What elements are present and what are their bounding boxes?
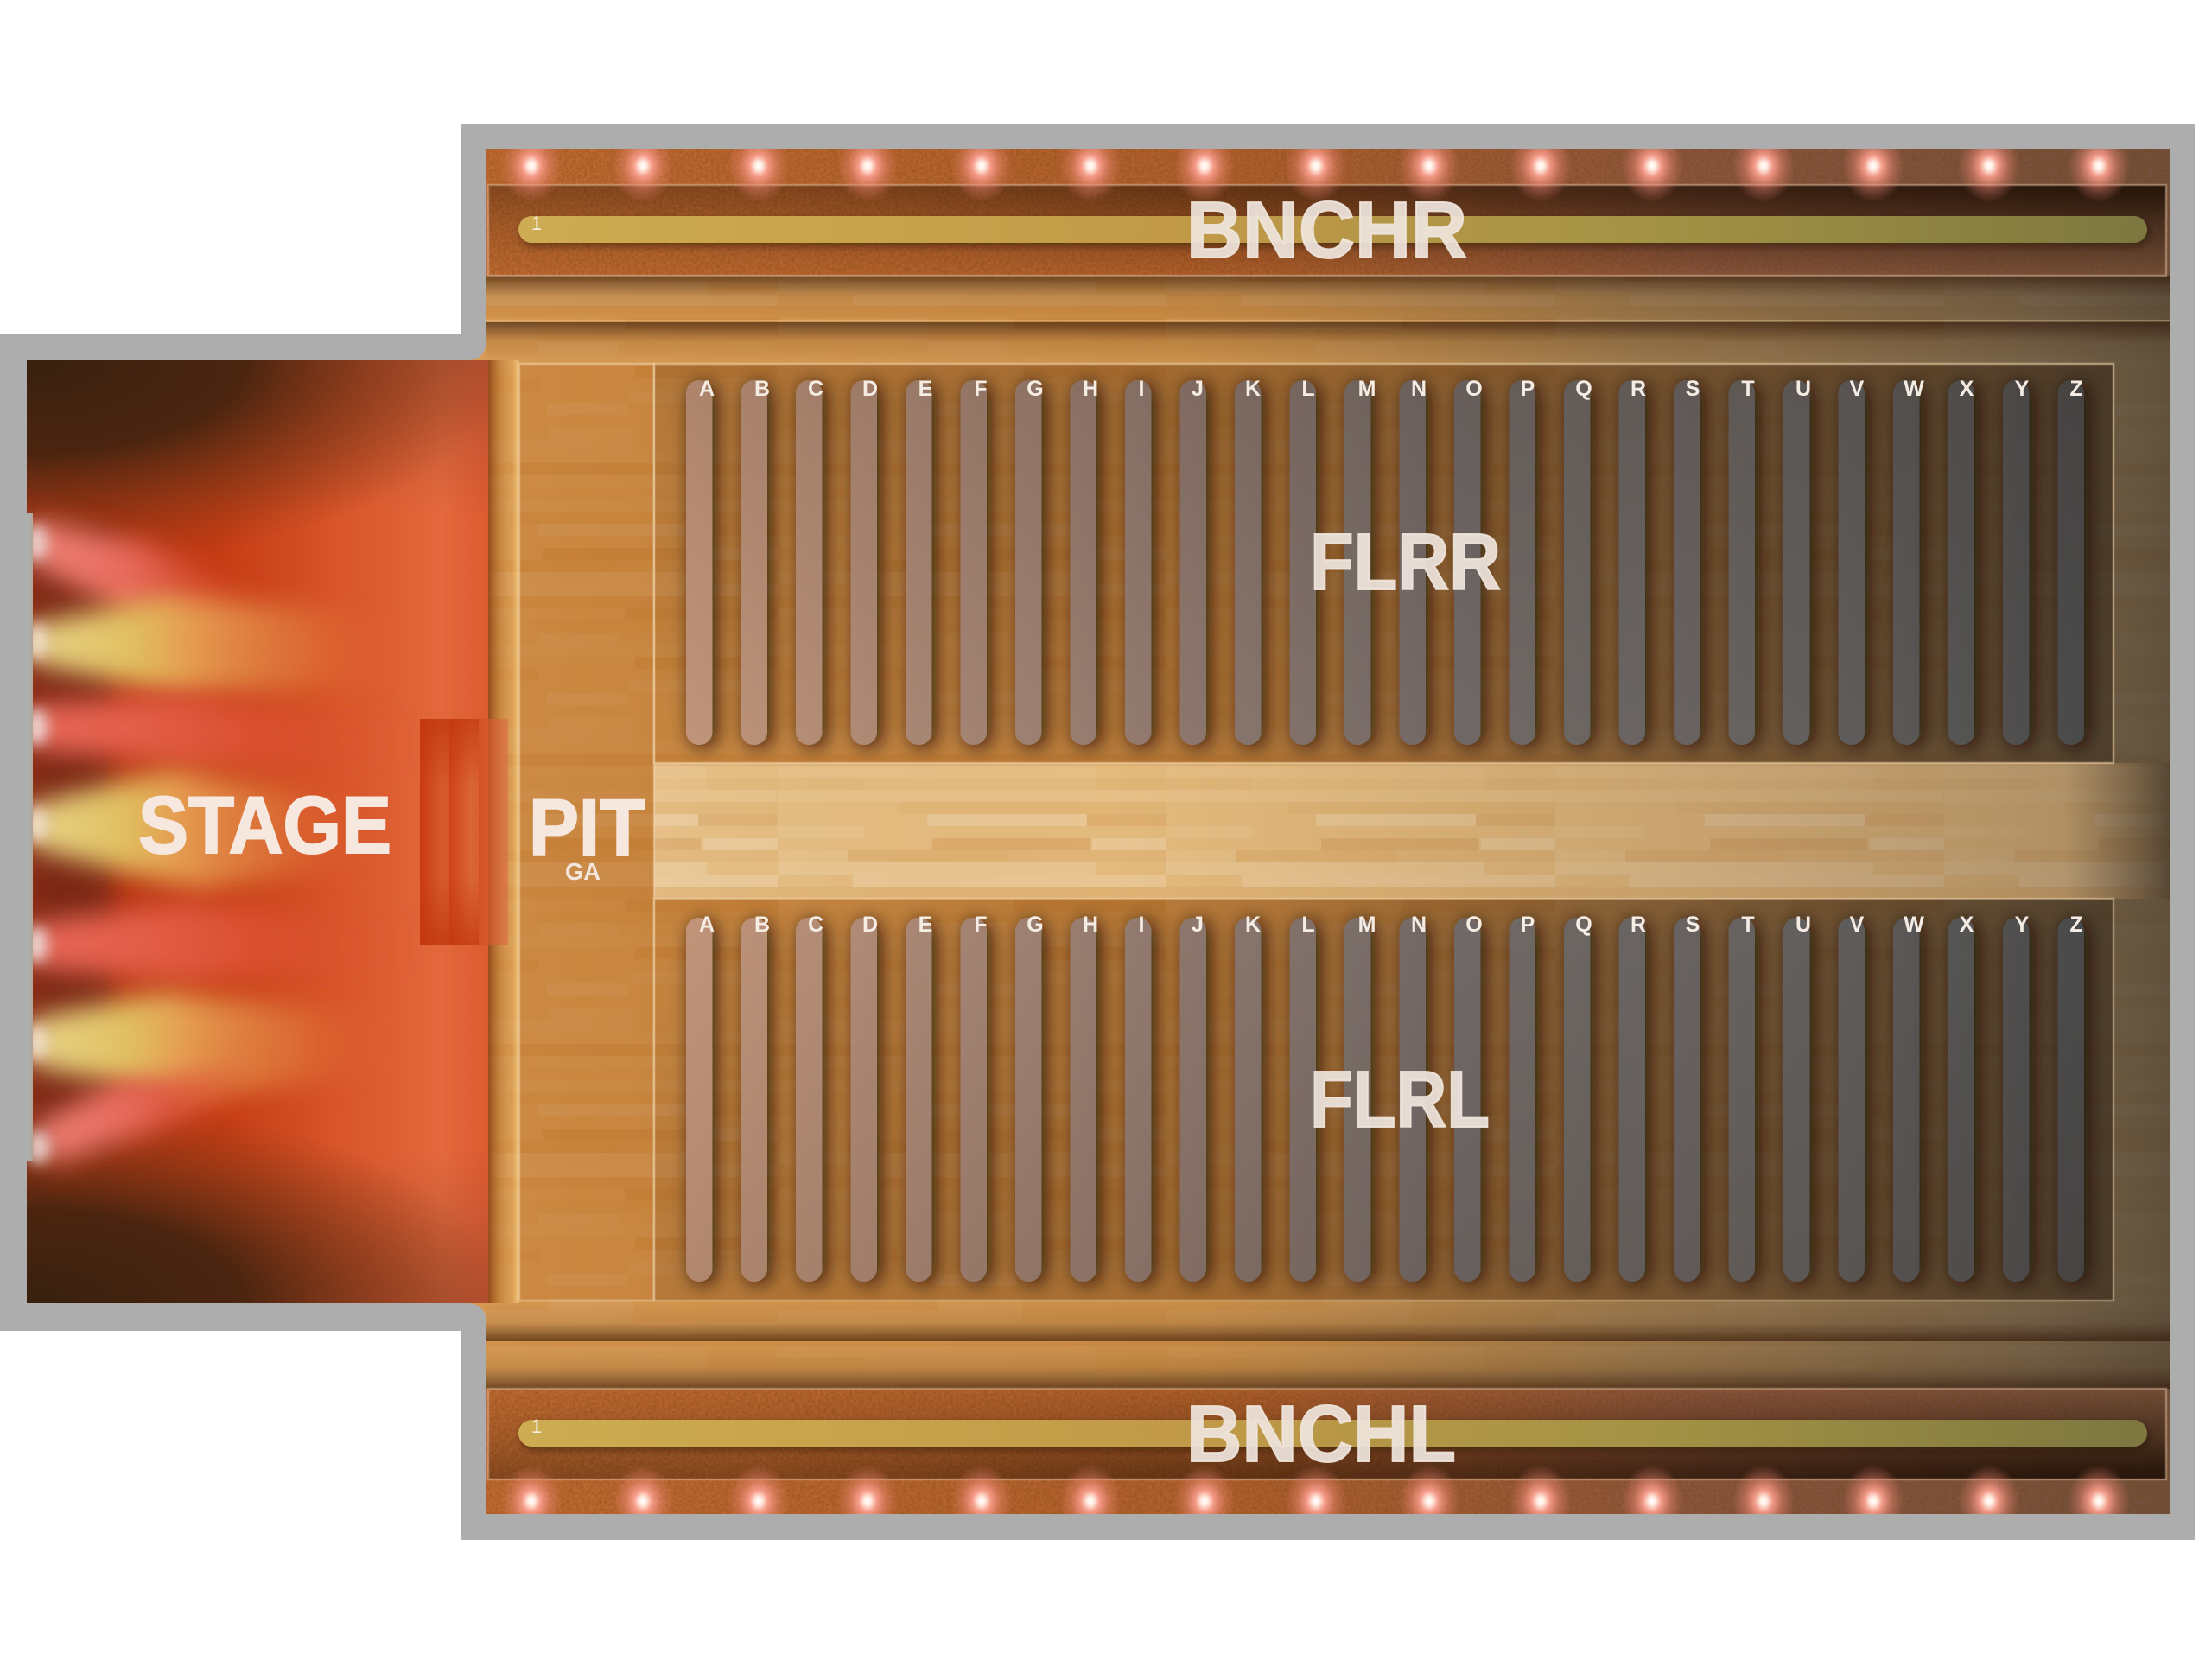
- row letters: floor left: D: [862, 913, 878, 937]
- row letters: floor right: N: [1411, 377, 1427, 401]
- label: FLRL: FLRL: [1310, 1054, 1490, 1144]
- bench row numbers: 1: [531, 1415, 542, 1437]
- seat rows: floor left: [686, 918, 2084, 1282]
- row letters: floor left: H: [1083, 913, 1098, 937]
- row letters: floor left: N: [1411, 913, 1427, 937]
- upper step shadows: [486, 276, 2170, 364]
- row letters: floor left: C: [808, 913, 823, 937]
- row letters: floor right: H: [1083, 377, 1098, 401]
- row letters: floor right: A: [699, 377, 715, 401]
- stage beam 6 yellow: [25, 992, 380, 1097]
- row letters: floor right: Y: [2015, 377, 2030, 401]
- row letters: floor left: I: [1139, 913, 1144, 937]
- row letters: floor right: V: [1850, 377, 1865, 401]
- row letters: floor left: U: [1796, 913, 1811, 937]
- label: STAGE: STAGE: [138, 779, 391, 870]
- row letters: floor left: F: [974, 913, 988, 937]
- seat rows: floor right: [686, 380, 2084, 745]
- row letters: floor right: J: [1192, 377, 1204, 401]
- row letters: floor left: [699, 913, 2083, 937]
- bottom strip lights: [500, 1465, 2130, 1537]
- stage beam 3 red: [33, 684, 296, 773]
- stage stairs: [420, 719, 508, 945]
- row letters: floor right: C: [808, 377, 823, 401]
- section box: floor left: [654, 899, 2113, 1301]
- row letters: floor left: X: [1960, 913, 1974, 937]
- label: BNCHR: BNCHR: [1186, 185, 1467, 275]
- row letters: floor left: Z: [2069, 913, 2083, 937]
- row letters: floor left: J: [1192, 913, 1204, 937]
- stage beam 5 red: [33, 895, 296, 990]
- row letters: floor left: T: [1741, 913, 1755, 937]
- wood floor: [467, 276, 2170, 1389]
- stage beam 4 yellow: [25, 769, 363, 890]
- row letters: floor right: U: [1796, 377, 1811, 401]
- row letters: floor right: P: [1521, 377, 1535, 401]
- row letters: floor right: [699, 377, 2083, 401]
- row letters: floor right: E: [918, 377, 932, 401]
- row letters: floor left: Q: [1575, 913, 1592, 937]
- row letters: floor left: B: [754, 913, 770, 937]
- stage beam 1 pink: [27, 506, 232, 614]
- row letters: floor right: O: [1465, 377, 1483, 401]
- row letters: floor right: L: [1301, 377, 1315, 401]
- top strip lights: [500, 130, 2130, 202]
- row letters: floor right: T: [1741, 377, 1755, 401]
- row letters: floor left: L: [1301, 913, 1315, 937]
- row letters: floor left: W: [1904, 913, 1924, 937]
- row letters: floor left: S: [1686, 913, 1700, 937]
- row letters: floor left: E: [918, 913, 932, 937]
- row letters: floor right: K: [1245, 377, 1261, 401]
- label: GA: GA: [565, 858, 601, 885]
- row letters: floor right: Z: [2069, 377, 2083, 401]
- row letters: floor left: M: [1358, 913, 1376, 937]
- row letters: floor left: O: [1465, 913, 1483, 937]
- row letters: floor left: P: [1521, 913, 1535, 937]
- label: BNCHL: BNCHL: [1186, 1389, 1456, 1479]
- row letters: floor right: R: [1630, 377, 1646, 401]
- bench row numbers: [531, 213, 542, 1437]
- row letters: floor right: D: [862, 377, 878, 401]
- row letters: floor right: B: [754, 377, 770, 401]
- row letters: floor right: S: [1686, 377, 1700, 401]
- row letters: floor right: M: [1358, 377, 1376, 401]
- top carpet and bench: [486, 149, 2170, 276]
- row letters: floor left: G: [1027, 913, 1044, 937]
- row letters: floor left: A: [699, 913, 715, 937]
- bench seating bars: [518, 216, 2147, 1447]
- row letters: floor right: Q: [1575, 377, 1592, 401]
- wall mask over light spill: [461, 124, 2195, 1540]
- row letters: floor right: W: [1904, 377, 1924, 401]
- row letters: floor right: F: [974, 377, 988, 401]
- row letters: floor left: K: [1245, 913, 1261, 937]
- row letters: floor left: R: [1630, 913, 1646, 937]
- row letters: floor right: I: [1139, 377, 1144, 401]
- row letters: floor left: V: [1850, 913, 1865, 937]
- row letters: floor right: X: [1960, 377, 1974, 401]
- stage edge glow: [488, 360, 519, 1303]
- row letters: floor left: Y: [2015, 913, 2030, 937]
- section box: floor right: [654, 364, 2113, 763]
- stage beam 2 yellow: [25, 596, 389, 693]
- bench row numbers: 1: [531, 213, 542, 234]
- stage beam 7 pink: [26, 1059, 276, 1165]
- pit section box: [519, 364, 654, 1301]
- label: FLRR: FLRR: [1310, 517, 1501, 607]
- label: PIT: PIT: [529, 784, 645, 872]
- lighting rail: [27, 513, 33, 1161]
- bottom carpet and bench: [486, 1389, 2170, 1514]
- row letters: floor right: G: [1027, 377, 1044, 401]
- stage floor: [25, 360, 488, 1303]
- lower step shadows: [486, 1301, 2170, 1389]
